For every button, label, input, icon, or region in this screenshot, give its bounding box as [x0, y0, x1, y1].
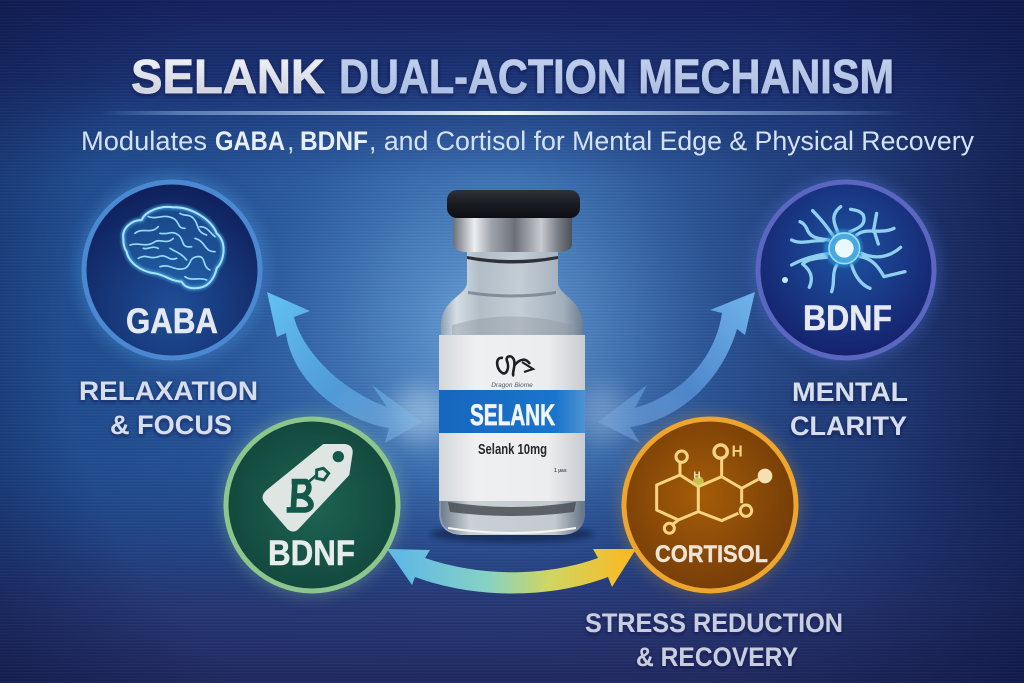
title: DUAL-ACTION MECHANISM	[339, 51, 894, 104]
title: SELANK	[131, 51, 325, 104]
caption: mental clarity	[790, 377, 908, 441]
title divider	[100, 111, 910, 115]
vial: glow and shadow	[430, 525, 594, 543]
subtitle: Modulates	[81, 126, 207, 156]
vial: fine print: 1 µas	[554, 468, 567, 474]
icon: molecule tag	[263, 444, 353, 532]
title	[131, 51, 894, 104]
arrow: BDNF to cortisol (double-headed, blue to yellow)	[387, 549, 636, 594]
caption: relaxation and focus	[79, 376, 258, 440]
subtitle: , and Cortisol for Mental Edge & Physical Recovery	[369, 126, 974, 156]
vial: label	[439, 335, 585, 501]
caption: stress reduction and recovery: & RECOVERY	[636, 642, 798, 672]
icon: brain	[123, 207, 224, 288]
icon: cortisol molecule	[657, 444, 772, 533]
vial: SELANK name: SELANK	[470, 399, 555, 432]
label: BDNF: BDNF	[268, 534, 355, 573]
caption: relaxation and focus: & FOCUS	[110, 410, 232, 440]
vial: liquid shadow rings	[467, 256, 558, 264]
label: CORTISOL: CORTISOL	[655, 541, 768, 568]
subtitle: GABA	[215, 126, 285, 156]
subtitle	[81, 126, 974, 156]
vial: metal crimp	[453, 217, 572, 252]
arrow: GABA to vial (double-headed)	[267, 292, 422, 443]
subtitle: ,	[287, 126, 295, 156]
caption: mental clarity: CLARITY	[790, 411, 907, 441]
panel: GABA circle	[76, 174, 268, 366]
panel: BDNF blue circle	[752, 176, 940, 364]
arrow: BDNF to vial (double-headed)	[598, 292, 755, 443]
caption: stress reduction and recovery	[585, 608, 843, 672]
label: BDNF: BDNF	[803, 299, 892, 338]
caption: stress reduction and recovery: STRESS REDUCTION	[585, 608, 843, 638]
vial: logo caption: Dragon Biome	[491, 382, 533, 389]
vial	[430, 190, 594, 543]
vial: dosage: Selank 10mg	[478, 441, 547, 458]
caption: mental clarity: MENTAL	[792, 377, 908, 407]
vial: black cap	[447, 190, 580, 218]
icon: neuron	[782, 207, 905, 292]
vial: glass bottom	[441, 500, 583, 535]
label: GABA: GABA	[126, 302, 218, 341]
vial: glass body	[439, 251, 585, 535]
panel: cortisol circle	[618, 413, 802, 597]
icon: cortisol molecule: H	[693, 470, 701, 481]
subtitle: BDNF	[300, 126, 368, 156]
panel: BDNF green circle	[220, 413, 404, 597]
vial: blue band	[439, 390, 585, 433]
icon: cortisol molecule: H	[732, 444, 743, 461]
vial: dragon logo	[497, 356, 533, 376]
caption: relaxation and focus: RELAXATION	[79, 376, 258, 406]
